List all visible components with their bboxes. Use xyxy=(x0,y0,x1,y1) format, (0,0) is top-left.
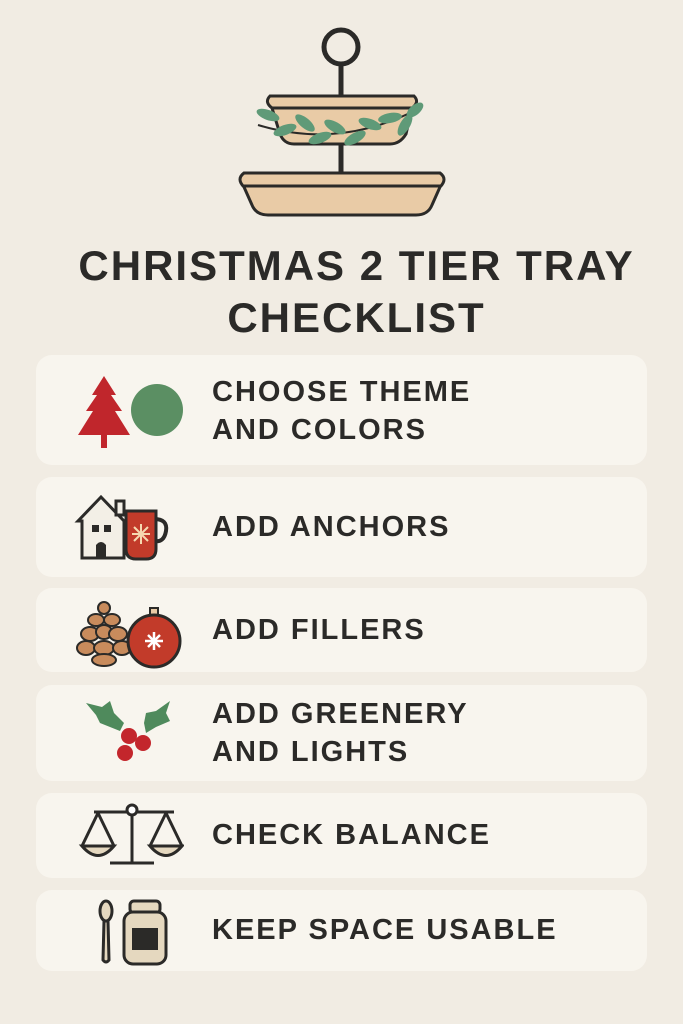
text: ADD ANCHORS xyxy=(212,511,450,543)
icon: pinecone and ornament xyxy=(76,601,182,668)
text: KEEP SPACE USABLE xyxy=(212,914,558,946)
icon: holly xyxy=(86,701,170,761)
icon: tree and circle xyxy=(78,376,183,448)
text: CHOOSE THEME xyxy=(212,376,471,408)
text: ADD FILLERS xyxy=(212,614,426,646)
icon: house and mug xyxy=(74,495,168,560)
title: CHECKLIST xyxy=(227,294,486,341)
panel: anchors xyxy=(36,477,647,577)
text: ADD GREENERY xyxy=(212,698,469,730)
title xyxy=(78,242,635,341)
text: CHECK BALANCE xyxy=(212,819,491,851)
icon: scales xyxy=(78,804,184,864)
panel: fillers xyxy=(36,588,647,672)
panel: choose theme xyxy=(36,355,647,465)
panel: greenery xyxy=(36,685,647,781)
text xyxy=(212,376,471,446)
text: AND COLORS xyxy=(212,414,427,446)
icon: two tier tray xyxy=(238,28,446,216)
icon: spoon and jar xyxy=(98,900,168,966)
panel: keep space usable xyxy=(36,890,647,971)
title: CHRISTMAS 2 TIER TRAY xyxy=(78,242,635,289)
text: AND LIGHTS xyxy=(212,736,409,768)
panel: balance xyxy=(36,793,647,878)
text xyxy=(212,698,469,768)
